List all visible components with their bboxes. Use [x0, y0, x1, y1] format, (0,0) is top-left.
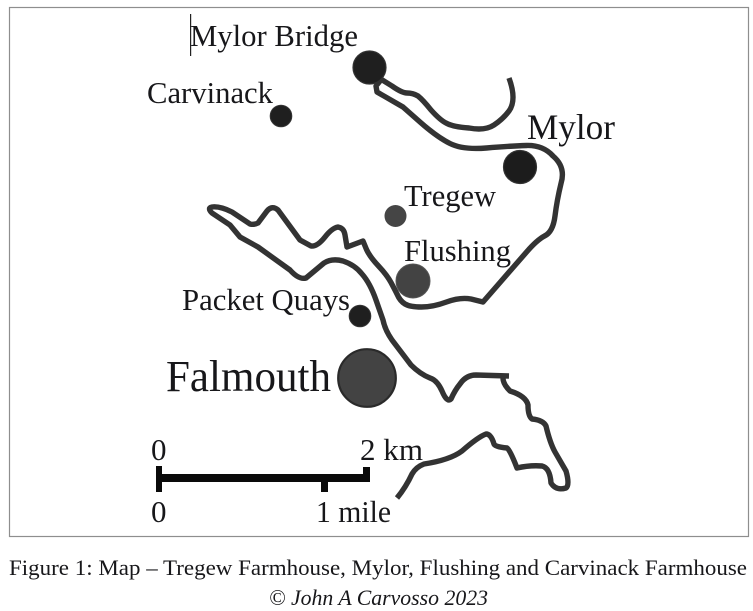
scale bar: lines [156, 466, 370, 492]
marker: Carvinack [270, 105, 292, 127]
scale label: 2 km: 2 km [360, 432, 423, 467]
label: Tregew: Tregew [404, 178, 497, 213]
scale label: 1 mile: 1 mile [316, 494, 391, 529]
marker: Mylor [504, 150, 536, 184]
marker: Tregew [384, 205, 406, 227]
label: Packet Quays: Packet Quays [182, 282, 350, 317]
marker: Falmouth [338, 349, 396, 407]
caption: figure title: Figure 1: Map – Tregew Farmhouse, Mylor, Flushing and Carvinack Farmhouse [9, 555, 747, 580]
scale label: 0 miles: 0 [151, 494, 166, 529]
marker: Packet Quays [349, 305, 371, 327]
marker: Mylor Bridge [353, 51, 386, 84]
label: Falmouth: Falmouth [166, 352, 331, 401]
text cursor mark [190, 14, 191, 56]
label: Carvinack: Carvinack [147, 75, 273, 110]
marker: Flushing [396, 264, 430, 298]
coastline: southern inlet [397, 378, 568, 498]
caption: copyright: © John A Carvosso 2023 [269, 585, 488, 610]
label: Flushing: Flushing [404, 233, 511, 268]
scale label: 0 km: 0 [151, 432, 166, 467]
label: Mylor: Mylor [527, 107, 615, 147]
scale bar [151, 432, 423, 529]
coastline: main estuary outline [210, 81, 562, 400]
label: Mylor Bridge: Mylor Bridge [190, 18, 358, 53]
river: upper creek strand [379, 78, 513, 129]
